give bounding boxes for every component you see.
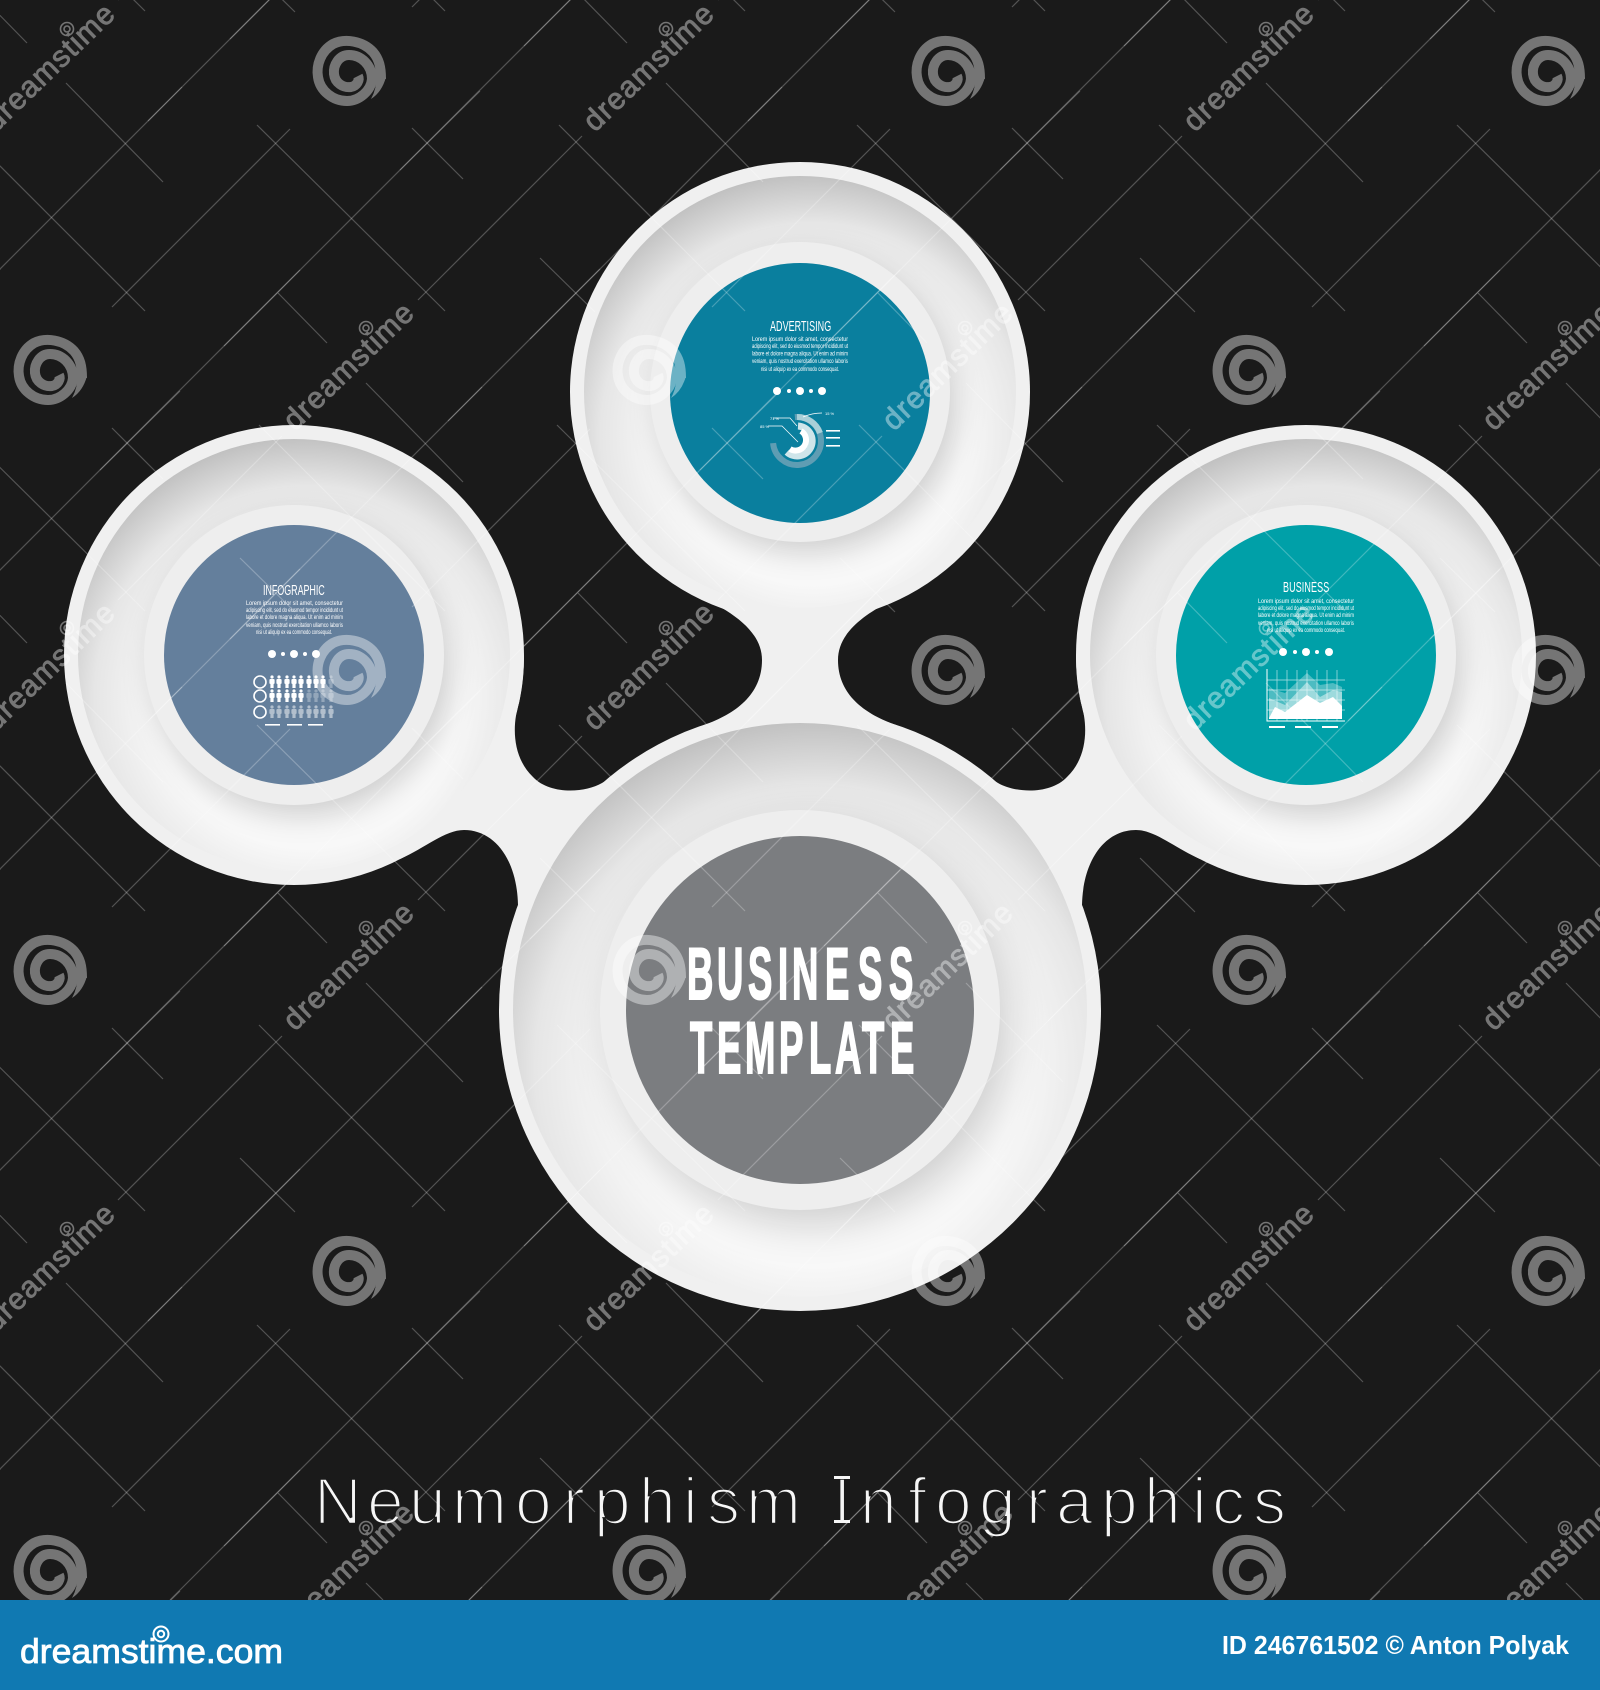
watermark layer: dreamstime <box>277 1496 421 1637</box>
heading: infographic: INFOGRAPHIC <box>263 582 325 599</box>
text block: infographic body: adipiscing elit, sed do eiusmod tempor incididunt ut <box>246 608 343 614</box>
pictogram rows <box>254 675 334 726</box>
panel: business circle <box>1076 425 1536 885</box>
text block: infographic body: labore et dolore magna aliqua. Ut enim ad minim <box>246 615 343 621</box>
text block: infographic body: Lorem ipsum dolor sit amet, consectetur <box>246 601 343 607</box>
area chart <box>1267 669 1345 728</box>
donut chart: 15 % <box>825 411 835 416</box>
donut chart: 71 % <box>770 416 780 421</box>
text block: business body: nisi ut aliquip ex ea commodo consequat. <box>1267 628 1345 634</box>
text block: advertising body <box>752 337 848 373</box>
dots <box>268 650 320 658</box>
panel: infographic circle <box>64 425 524 885</box>
text block: advertising body: Lorem ipsum dolor sit amet, consectetur <box>752 337 848 343</box>
watermark layer: dreamstime <box>577 1197 721 1338</box>
heading: business template: TEMPLATE <box>690 1008 914 1089</box>
text block: infographic body: veniam, quis nostrud exercitation ullamco laboris <box>246 623 343 629</box>
watermark layer: dreamstime <box>1177 0 1321 138</box>
text block: infographic body: nisi ut aliquip ex ea commodo consequat. <box>256 630 332 636</box>
text block: business body: veniam, quis nostrud exercitation ullamco laboris <box>1258 621 1354 627</box>
watermark layer: dreamstime <box>277 896 421 1037</box>
heading: business: BUSINESS <box>1283 579 1329 596</box>
panel: advertising circle <box>570 162 1030 622</box>
watermark layer: dreamstime <box>1177 596 1321 737</box>
watermark layer: dreamstime <box>876 296 1020 437</box>
watermark layer: dreamstime <box>876 1496 1020 1637</box>
neumorphic connector shape <box>400 588 1200 1010</box>
text block: business body: labore et dolore magna aliqua. Ut enim ad minim <box>1258 613 1354 619</box>
dots <box>773 387 826 395</box>
watermark layer: dreamstime <box>577 596 721 737</box>
footer logo: dreamstime.com <box>20 1633 283 1671</box>
text block: business body: Lorem ipsum dolor sit amet, consectetur <box>1258 599 1354 605</box>
dots <box>1279 648 1333 656</box>
footer bar <box>0 1600 1600 1690</box>
watermark layer: dreamstime <box>277 296 421 437</box>
text block: advertising body: nisi ut aliquip ex ea commodo consequat. <box>761 367 839 373</box>
panel: center circle <box>499 709 1101 1311</box>
donut chart: 85 % <box>760 424 770 429</box>
title: Neumorphism Infographics <box>314 1464 1286 1538</box>
heading: business template: BUSINESS <box>687 934 913 1015</box>
text block: advertising body: adipiscing elit, sed do eiusmod tempor incididunt ut <box>752 344 848 350</box>
footer credit: ID 246761502 © Anton Polyak <box>1222 1630 1570 1660</box>
text block: infographic body <box>246 601 343 636</box>
text block: business body: adipiscing elit, sed do eiusmod tempor incididunt ut <box>1258 606 1354 612</box>
text block: advertising body: veniam, quis nostrud exercitation ullamco laboris <box>752 359 848 365</box>
donut chart <box>760 411 840 467</box>
heading: advertising: ADVERTISING <box>770 318 831 335</box>
watermark layer: dreamstime <box>876 896 1020 1037</box>
heading: business template <box>687 934 914 1089</box>
text block: business body <box>1258 599 1354 634</box>
text block: advertising body: labore et dolore magna aliqua. Ut enim ad minim <box>752 352 848 358</box>
watermark layer: dreamstime <box>1177 1197 1321 1338</box>
watermark layer: dreamstime <box>577 0 721 138</box>
